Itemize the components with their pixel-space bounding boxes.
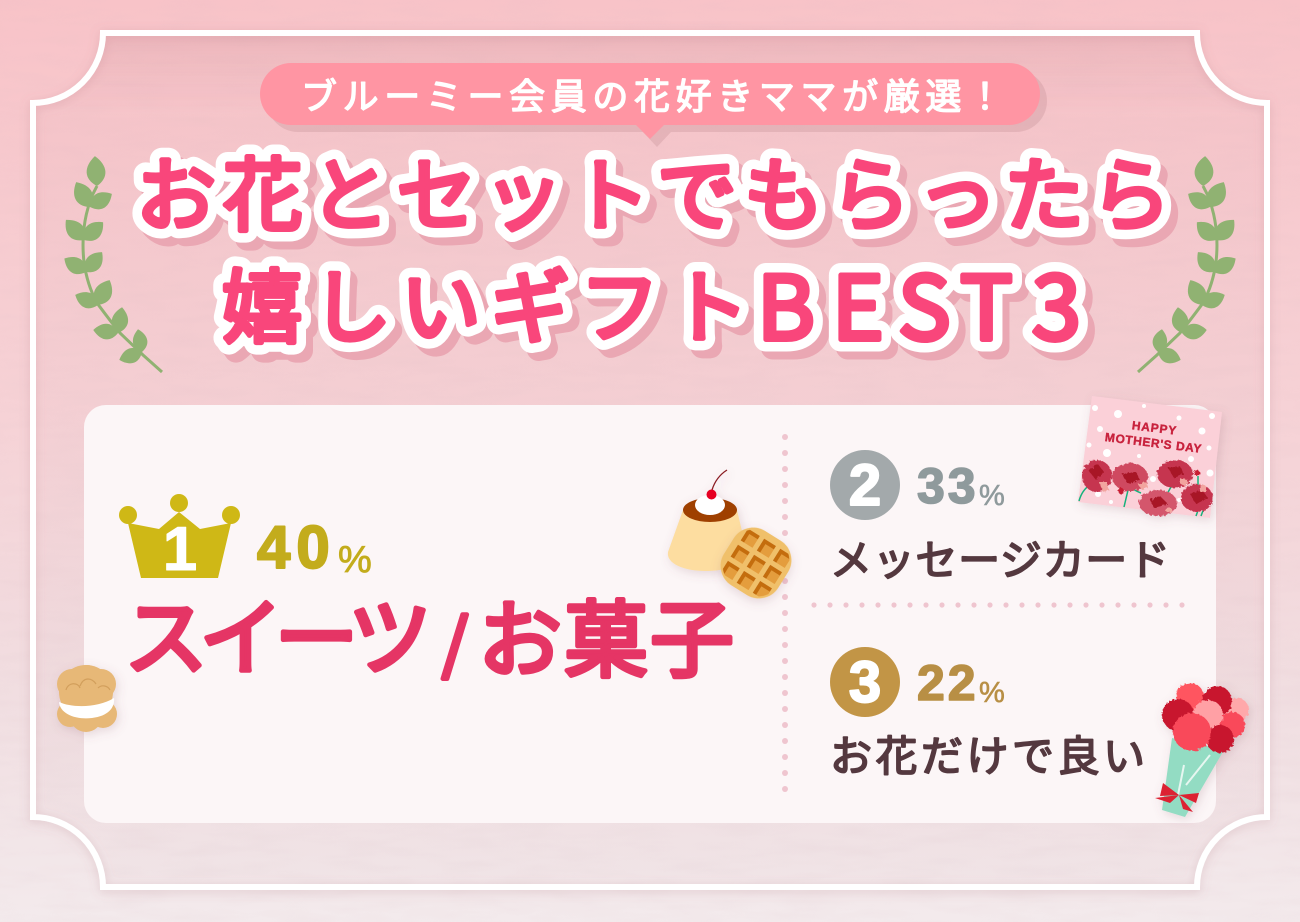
rank 3 badge [830, 647, 900, 717]
icon: mother's day card [1078, 396, 1222, 518]
panel: ranking [84, 405, 1216, 823]
title: お花とセットでもらったら [143, 140, 1178, 256]
speech pill [260, 63, 1047, 147]
right laurel [1138, 155, 1240, 372]
rank 1 percentage [257, 514, 372, 581]
icon: pudding [668, 470, 747, 571]
title: BEST3 [757, 238, 1081, 366]
left laurel [60, 155, 162, 372]
rank 1 percentage: 40 [257, 514, 336, 581]
title: 嬉しいギフト [222, 244, 749, 360]
pill text: ブルーミー会員の花好きママが厳選！ [301, 68, 1003, 120]
rank 1 label [124, 572, 734, 695]
rank 1 label: スイーツ [124, 572, 432, 693]
rank 2 badge [830, 450, 900, 520]
icon: gold crown rank 1: 1 [163, 515, 197, 584]
rank 3 percentage: 22 [917, 655, 979, 711]
title: 嬉しいギフト [222, 244, 749, 360]
icon: carnation bouquet [1155, 683, 1249, 817]
title: BEST3 [764, 246, 1088, 374]
rank 3 percentage: % [979, 677, 1005, 709]
icon: mother's day card: HAPPY [1131, 418, 1178, 438]
rank 2 percentage: 33 [917, 458, 979, 514]
rank 3 badge: 3 [849, 650, 881, 715]
title [136, 132, 1178, 374]
rank 1 label: お菓子 [478, 574, 734, 695]
title: 嬉しいギフト [229, 252, 756, 368]
icon: waffle [713, 520, 799, 606]
rank 2 badge: 2 [849, 453, 881, 518]
title: お花とセットでもらったら [136, 132, 1171, 248]
title: お花とセットでもらったら [136, 132, 1171, 248]
rank 2 label: メッセージカード [830, 527, 1170, 588]
icon: gold crown rank 1 [119, 494, 240, 584]
rank 1 percentage: % [338, 539, 372, 581]
title: BEST3 [757, 238, 1081, 366]
rank 2 percentage: % [979, 480, 1005, 512]
icon: mother's day card: MOTHER'S DAY [1104, 430, 1203, 456]
icon: cream puff [57, 665, 117, 732]
rank 1 label: / [442, 591, 468, 687]
rank 3 label: お花だけで良い [830, 723, 1145, 784]
